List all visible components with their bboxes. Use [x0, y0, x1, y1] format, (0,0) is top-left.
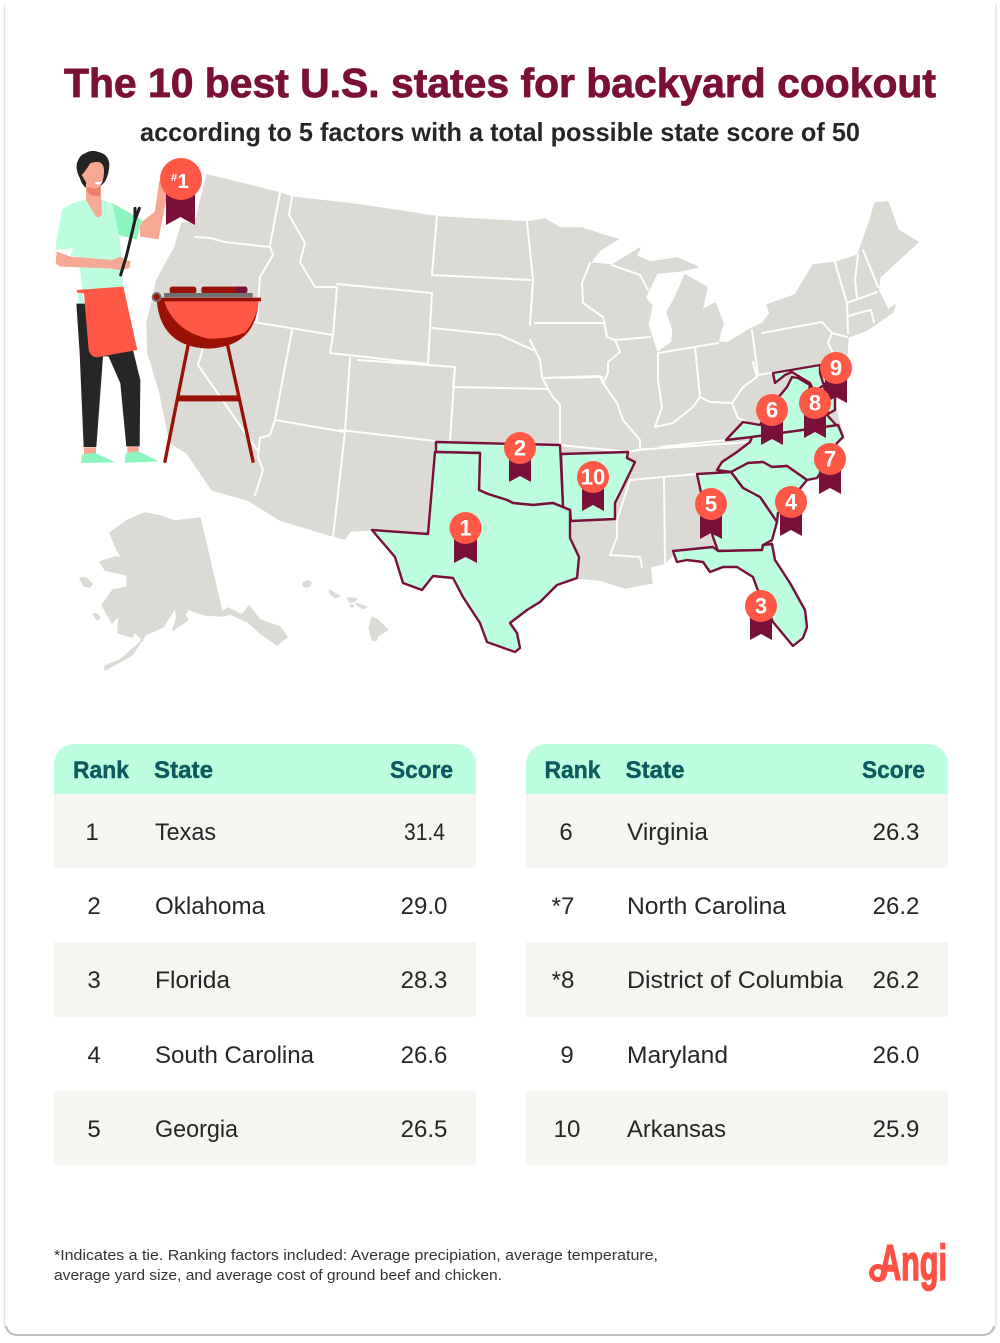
table header: State — [154, 757, 213, 784]
table: ranks 6 to 10 — [526, 744, 948, 1165]
map: contiguous states land — [147, 175, 918, 652]
table header: Rank — [73, 757, 130, 784]
row: District of Columbia: 26.2 — [873, 967, 919, 994]
footnote: *Indicates a tie. Ranking factors included: Average precipiation, average temperature, — [54, 1248, 658, 1264]
row: Maryland: Maryland — [627, 1042, 728, 1069]
row: Texas: Texas — [155, 819, 216, 846]
row: District of Columbia: *8 — [552, 967, 574, 994]
person: raised arm — [140, 180, 167, 239]
table: ranks 1 to 5 — [54, 744, 476, 1165]
table header: Rank — [544, 757, 601, 784]
title: The 10 best U.S. states for backyard cookout — [64, 60, 936, 106]
badge: rank 4: 4 — [785, 490, 798, 514]
badge: rank 2: 2 — [514, 436, 526, 460]
map: highlighted states — [372, 365, 843, 652]
grill: bowl — [155, 298, 261, 349]
row: Virginia: Virginia — [627, 819, 709, 846]
badge: rank 8: 8 — [809, 390, 821, 416]
subtitle: according to 5 factors with a total possible state score of 50 — [140, 117, 860, 147]
map of the United States — [80, 175, 918, 670]
row: Florida: Florida — [155, 967, 231, 994]
badge: rank 7 — [814, 443, 846, 494]
badge: rank 8 — [799, 387, 831, 438]
grill: legs — [165, 344, 253, 463]
state: North Carolina — [717, 425, 843, 480]
person: apron — [77, 287, 137, 357]
state: Oklahoma — [436, 442, 563, 507]
row: Oklahoma: 2 — [87, 893, 101, 920]
person: hair — [77, 151, 109, 190]
badge: rank 9: 9 — [830, 356, 842, 380]
logo: Angi: Angi — [879, 1235, 947, 1291]
person: forearm and hand — [56, 252, 131, 270]
row: Virginia: 26.3 — [873, 819, 919, 846]
row: Texas: 31.4 — [404, 819, 445, 846]
badge: number one ribbon — [160, 158, 202, 225]
badge: rank 7: 7 — [824, 446, 836, 472]
badge: rank 9 — [820, 352, 852, 403]
table header — [526, 744, 948, 794]
state: Virginia — [726, 377, 838, 440]
badge: rank 5 — [695, 488, 727, 539]
badge: rank 4 — [775, 486, 807, 536]
state: Florida — [673, 544, 807, 646]
row: Texas: 1 — [85, 819, 99, 846]
row: Florida: 28.3 — [401, 967, 447, 994]
illustration: person grilling — [55, 151, 261, 463]
row: Arkansas: 10 — [554, 1116, 580, 1143]
badge: number one ribbon: # — [171, 172, 177, 184]
illustration: grill — [152, 287, 261, 463]
row: North Carolina: 26.2 — [873, 893, 919, 920]
row: North Carolina — [552, 893, 919, 920]
person: neck and face — [82, 162, 104, 217]
footnote — [54, 1248, 658, 1284]
row: Georgia: 26.5 — [401, 1116, 447, 1143]
row: North Carolina: *7 — [552, 893, 574, 920]
logo: Angi — [872, 1235, 947, 1291]
table header: Score — [862, 757, 925, 784]
badge: rank 1 — [450, 512, 482, 563]
row: Oklahoma — [87, 893, 447, 920]
badge: rank 6: 6 — [766, 398, 778, 422]
state: Maryland and Delaware — [773, 365, 835, 414]
row: Arkansas: Arkansas — [627, 1116, 726, 1143]
table header: State — [626, 757, 684, 784]
row: Arkansas: 25.9 — [873, 1116, 919, 1143]
badge: rank 6 — [756, 394, 788, 445]
map: Hawaii — [303, 581, 388, 641]
state: Texas — [372, 452, 579, 652]
row: Georgia: Georgia — [155, 1116, 239, 1143]
row: Oklahoma: 29.0 — [401, 893, 447, 920]
badge: number one ribbon: 1 — [177, 171, 189, 193]
row: Maryland — [560, 1042, 919, 1069]
state: South Carolina — [731, 462, 807, 522]
badge: rank 5: 5 — [705, 492, 717, 516]
person: legs and trousers — [76, 303, 141, 447]
badge: rank 2 — [504, 432, 536, 482]
row: District of Columbia — [526, 942, 948, 1017]
badge: rank 3 — [745, 590, 777, 640]
row: South Carolina: 26.6 — [401, 1042, 447, 1069]
badge: rank 1: 1 — [459, 516, 472, 540]
row: South Carolina — [87, 1042, 447, 1069]
row: Texas — [54, 794, 476, 868]
person: ankles and shoes — [82, 447, 157, 462]
grill: handle — [152, 292, 162, 302]
badge: rank 3: 3 — [755, 594, 767, 618]
table header — [54, 744, 476, 794]
row: Virginia — [526, 794, 948, 868]
badge: rank 10: 10 — [581, 464, 605, 490]
person: shirt — [55, 200, 123, 303]
footnote: average yard size, and average cost of ground beef and chicken. — [54, 1268, 502, 1284]
table header: Score — [390, 757, 453, 784]
grill: sausages — [170, 287, 247, 293]
state: Georgia — [697, 472, 777, 551]
person: sleeve — [112, 203, 142, 239]
row: Oklahoma: Oklahoma — [155, 893, 266, 920]
row: District of Columbia: District of Columbia — [627, 967, 844, 994]
row: Florida — [54, 942, 476, 1017]
row: Georgia — [54, 1091, 476, 1165]
badge: rank 10 — [577, 461, 609, 511]
row: Maryland: 9 — [560, 1042, 574, 1069]
row: North Carolina: North Carolina — [627, 893, 787, 920]
row: Arkansas — [526, 1091, 948, 1165]
state: Arkansas — [561, 452, 635, 521]
row: Florida: 3 — [87, 967, 101, 994]
row: Virginia: 6 — [559, 819, 573, 846]
map: Alaska — [80, 513, 287, 670]
row: South Carolina: 4 — [87, 1042, 101, 1069]
row: Georgia: 5 — [87, 1116, 101, 1143]
tool: tongs — [121, 208, 139, 275]
map: rank badges — [450, 352, 852, 640]
row: South Carolina: South Carolina — [155, 1042, 315, 1069]
row: Maryland: 26.0 — [873, 1042, 919, 1069]
grill: grate — [164, 293, 253, 297]
